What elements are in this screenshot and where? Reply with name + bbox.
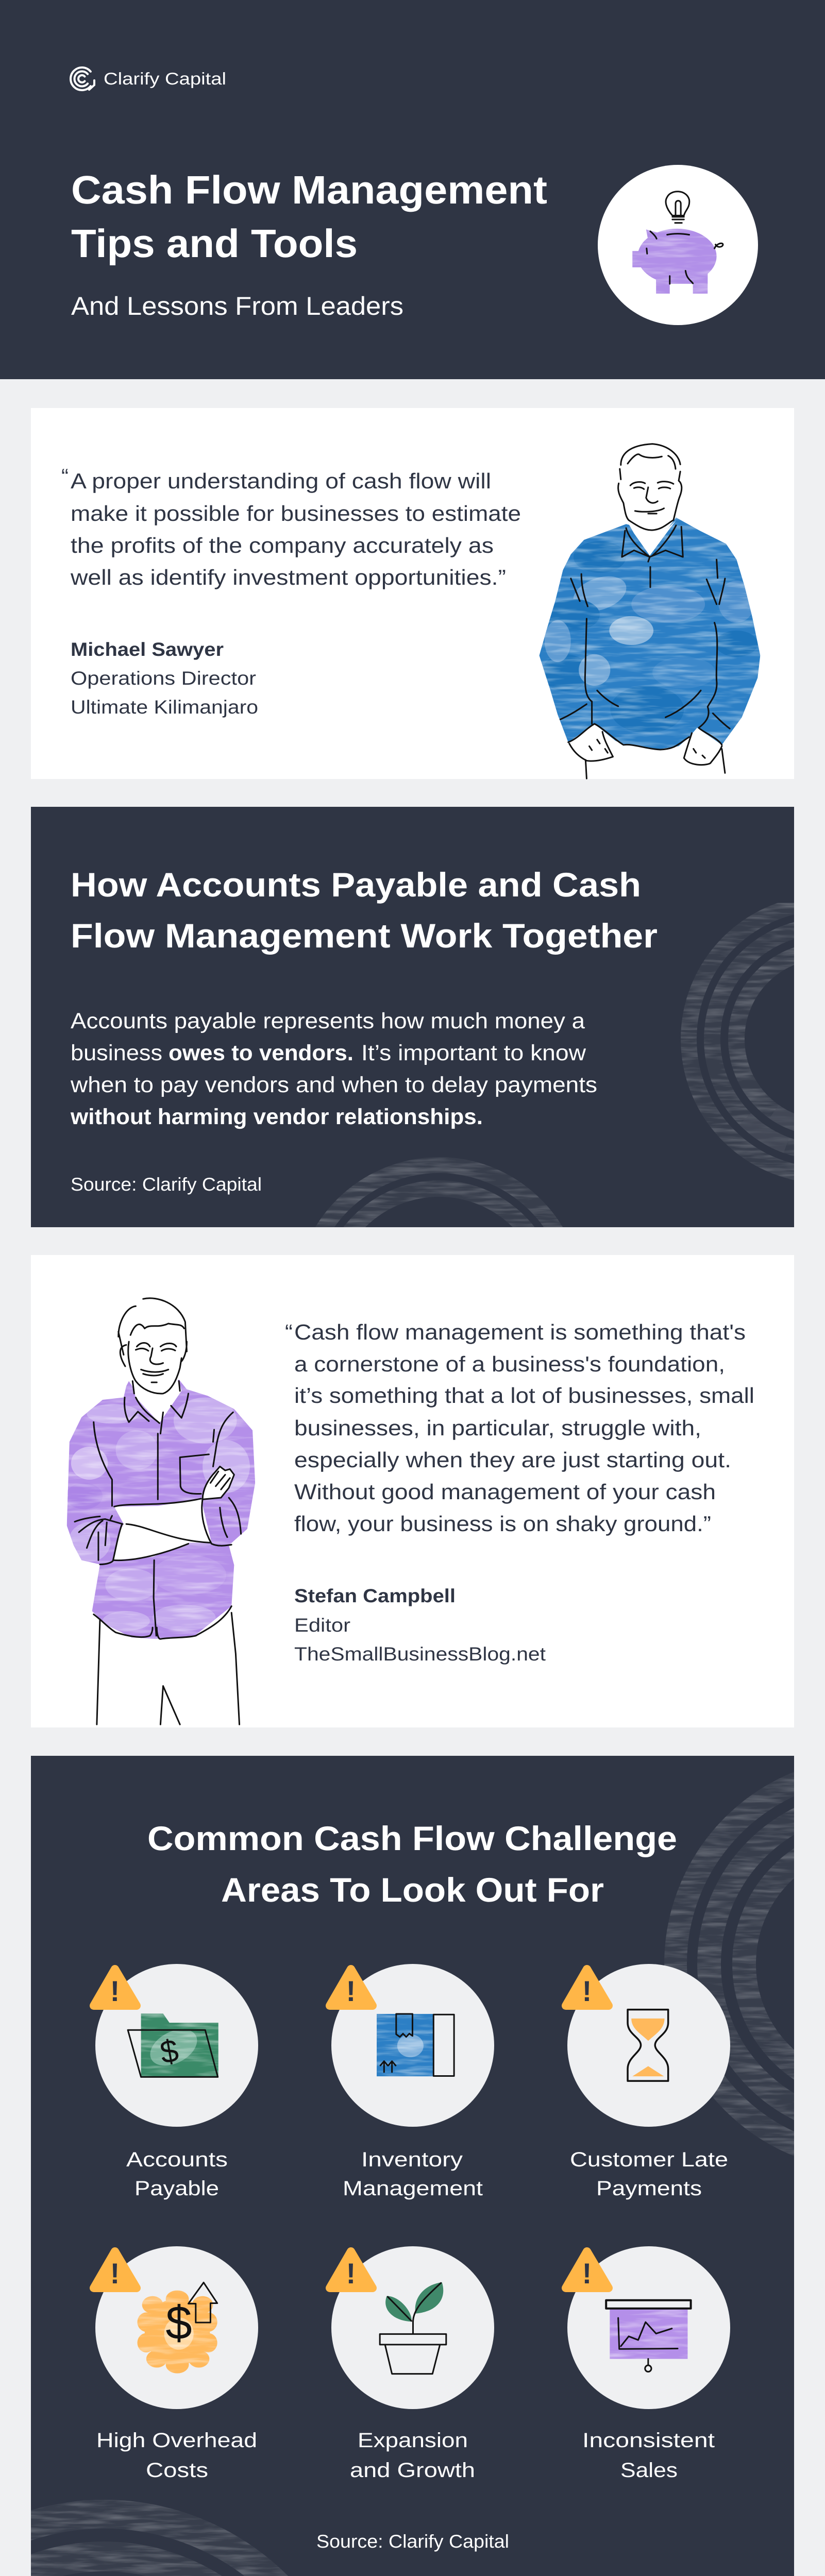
attribution: Ultimate Kilimanjaro [71, 697, 258, 718]
logo: Clarify Capital: Clarify Capital [104, 69, 226, 88]
label: Payable [134, 2177, 219, 2200]
attribution [294, 1585, 546, 1665]
quote text: flow, your business is on shaky ground.” [294, 1512, 711, 1536]
body text: owes to vendors. [169, 1041, 353, 1065]
icon: warning: ! [346, 2257, 356, 2290]
label: Inconsistent [582, 2429, 715, 2452]
label: Sales [620, 2459, 678, 2482]
icon: warning: ! [110, 2257, 120, 2290]
icon: warning [330, 1969, 373, 2007]
source: Source: Clarify Capital [71, 1174, 262, 1195]
header banner [0, 0, 825, 379]
illustration: man in blue shirt [539, 443, 761, 779]
icon: dollar badge with arrow [137, 2282, 217, 2374]
panel: Stefan Campbell quote [31, 1255, 794, 1727]
challenge: accounts payable [94, 1964, 258, 2200]
decorative brush rings [315, 903, 794, 1227]
quote text: “ [285, 1320, 293, 1344]
icon: warning [566, 1969, 609, 2007]
attribution: Operations Director [71, 668, 256, 689]
body text: without harming vendor relationships. [70, 1105, 483, 1129]
heading [71, 866, 658, 955]
body text: It’s important to know [361, 1041, 586, 1065]
icon: warning: ! [346, 1975, 356, 2007]
label: Inventory [361, 2148, 463, 2171]
label [350, 2429, 475, 2482]
panel: common cash flow challenges [0, 1756, 825, 2576]
quote text: well as identify investment opportunities.” [70, 565, 506, 589]
label: High Overhead [96, 2429, 257, 2452]
icon: warning [94, 2251, 137, 2290]
label: Payments [596, 2177, 702, 2200]
quote text: especially when they are just starting out. [294, 1448, 731, 1472]
label: Expansion [358, 2429, 468, 2452]
logo: Clarify Capital [71, 67, 226, 90]
icon: warning [566, 2251, 609, 2290]
icon: warning: ! [110, 1975, 120, 2007]
heading: How Accounts Payable and Cash [71, 866, 641, 904]
label [582, 2429, 715, 2482]
icon: box [377, 2014, 454, 2076]
heading: Common Cash Flow Challenge [147, 1819, 677, 1857]
attribution [71, 639, 258, 718]
icon: piggy bank with lightbulb [598, 165, 758, 325]
label: Management [343, 2177, 483, 2200]
icon: warning: ! [582, 2257, 592, 2290]
body text [70, 1009, 597, 1129]
illustration: man in purple shirt [53, 1298, 263, 1724]
subtitle: And Lessons From Leaders [71, 292, 403, 320]
body text: when to pay vendors and when to delay payments [70, 1073, 597, 1097]
quote text: it’s something that a lot of businesses, small [294, 1383, 754, 1408]
quote text: Without good management of your cash [294, 1480, 716, 1504]
title: Tips and Tools [71, 222, 358, 266]
quote text: make it possible for businesses to estimate [71, 501, 521, 526]
icon: potted plant [380, 2282, 446, 2374]
quote text [61, 464, 521, 589]
icon: warning [330, 2251, 373, 2290]
challenge: high overhead costs [94, 2246, 258, 2482]
source: Source: Clarify Capital [316, 2531, 509, 2552]
label: Costs [146, 2459, 208, 2482]
panel: accounts payable explanation [31, 807, 794, 1227]
challenge: expansion and growth [330, 2246, 494, 2482]
icon: hourglass [628, 2010, 668, 2081]
icon: folder [128, 2013, 218, 2077]
attribution: Michael Sawyer [71, 639, 224, 660]
body text: Accounts payable represents how much money a [71, 1009, 585, 1033]
decorative brush rings [0, 1768, 825, 2576]
label: Customer Late [570, 2148, 728, 2171]
attribution: TheSmallBusinessBlog.net [294, 1643, 546, 1665]
quote text: businesses, in particular, struggle with, [294, 1416, 701, 1440]
quote text: the profits of the company accurately as [71, 533, 494, 557]
challenge: inconsistent sales [566, 2246, 730, 2482]
panel: Michael Sawyer quote [31, 408, 794, 779]
label: and Growth [350, 2459, 475, 2482]
label [343, 2148, 483, 2200]
body text: business [71, 1041, 162, 1065]
label [96, 2429, 257, 2482]
quote text: A proper understanding of cash flow will [71, 469, 491, 493]
heading: Flow Management Work Together [71, 917, 658, 955]
title: Cash Flow Management [71, 168, 547, 212]
icon: presentation chart [606, 2300, 691, 2372]
quote text: “ [61, 464, 69, 488]
label [126, 2148, 228, 2200]
icon: folder: $ [158, 2033, 181, 2071]
label: Accounts [126, 2148, 228, 2171]
heading [147, 1819, 677, 1909]
attribution: Stefan Campbell [294, 1585, 456, 1606]
quote text [285, 1320, 754, 1536]
title [71, 168, 547, 266]
attribution: Editor [294, 1615, 350, 1636]
challenge: customer late payments [566, 1964, 730, 2200]
quote text: Cash flow management is something that's [294, 1320, 746, 1344]
icon: warning: ! [582, 1975, 592, 2007]
icon: dollar badge with arrow: $ [165, 2297, 192, 2349]
heading: Areas To Look Out For [221, 1871, 604, 1909]
challenge: inventory management [330, 1964, 494, 2200]
quote text: a cornerstone of a business's foundation, [294, 1352, 725, 1376]
label [570, 2148, 728, 2200]
icon: warning [94, 1969, 137, 2007]
